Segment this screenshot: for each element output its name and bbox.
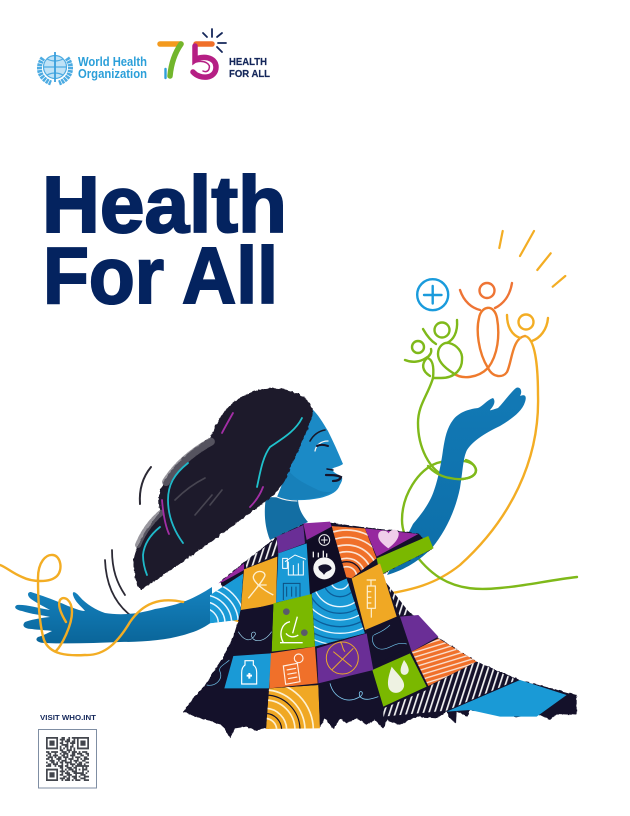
- patch: green drops: [372, 653, 427, 707]
- left arm and hand: [15, 587, 212, 643]
- neck: [265, 497, 308, 540]
- woman figure: [15, 388, 578, 738]
- icon: microscope: [280, 608, 308, 643]
- face: [277, 408, 343, 500]
- icon: document: [283, 654, 303, 684]
- line figures and threads: [183, 231, 577, 621]
- icon: houses: [283, 555, 306, 600]
- sun rays above figures: [499, 231, 565, 287]
- number 7: [160, 44, 181, 78]
- dress base: [183, 523, 577, 738]
- visit link label: VISIT WHO.INT: [40, 713, 96, 722]
- icon: water drops: [388, 660, 409, 693]
- yellow thread over left hand: [0, 555, 183, 655]
- patch: thread bottom left: [207, 660, 229, 685]
- patch: purple upper: [277, 525, 305, 553]
- number 5: [193, 44, 216, 77]
- patch: orange stripes: [412, 638, 477, 686]
- green figures: [405, 320, 462, 378]
- patchwork dress: [183, 522, 578, 738]
- icon: globe and plus: [313, 535, 335, 579]
- patch: black stripes right: [387, 583, 410, 617]
- icon: prohibited scissors: [326, 642, 358, 674]
- patch: black swirl right: [365, 618, 408, 667]
- icon: WHO emblem: [39, 52, 71, 83]
- face shadow: [277, 470, 333, 499]
- QR code: [38, 730, 96, 788]
- icon: syringe: [367, 580, 376, 618]
- patch: blue house: [276, 543, 310, 603]
- sun rays: [203, 29, 226, 52]
- thread motif: [238, 632, 272, 641]
- patch: yellow arcs: [266, 685, 320, 729]
- patch: orange arcs: [332, 526, 376, 578]
- QR frame: [38, 730, 96, 788]
- title: [42, 160, 287, 320]
- patch: yellow syringe: [352, 563, 397, 630]
- patch: black globe: [305, 527, 347, 593]
- patch: purple heart: [365, 528, 418, 557]
- yellow small loop: [56, 598, 72, 651]
- patch: blue bottle: [224, 653, 271, 688]
- icon: ribbon: [248, 571, 273, 598]
- text: World Health Organization: [78, 55, 147, 81]
- logo tagline: [229, 57, 270, 80]
- hair motion lines: [105, 467, 151, 615]
- patch: blue sleeve arcs: [210, 574, 244, 624]
- patch: black stripes upper: [245, 538, 278, 568]
- patch: black swirl left: [233, 605, 273, 656]
- patch: magenta wedge: [218, 563, 244, 583]
- patch: magenta collar: [303, 522, 332, 540]
- patch: blue hem: [447, 680, 567, 717]
- patch: green microscope: [272, 594, 315, 652]
- icon: heart: [378, 530, 399, 548]
- logo tagline: FOR ALL: [229, 69, 270, 80]
- orange figure and thread: [453, 283, 525, 377]
- green loop over right arm: [428, 460, 476, 479]
- yellow figure: [507, 314, 548, 341]
- patch: purple scissors: [317, 633, 373, 683]
- 75 logo: [160, 29, 226, 78]
- threads in front of arms: [0, 460, 476, 655]
- thread motif bottom: [330, 683, 378, 700]
- yellow thread: [183, 336, 538, 621]
- patch: orange document: [269, 647, 318, 688]
- title: For All: [43, 231, 278, 320]
- hair highlights: [143, 413, 302, 575]
- hair: [133, 388, 313, 590]
- icon: medicine bottle: [242, 661, 257, 684]
- thread motif: [372, 625, 407, 649]
- patch: black white stripes bottom: [383, 662, 517, 717]
- text: World Health Organization: World Health: [78, 55, 147, 69]
- title: Health: [42, 160, 287, 249]
- WHO logo: [39, 52, 147, 83]
- green thread: [402, 378, 577, 589]
- right arm and hand: [387, 388, 526, 575]
- patch: yellow ribbon: [241, 557, 277, 612]
- text: World Health Organization: Organization: [78, 67, 147, 81]
- QR modules: [46, 738, 89, 780]
- patch: purple right: [400, 615, 438, 652]
- icon: plus in circle: [417, 279, 448, 310]
- face details: [277, 430, 341, 501]
- logo tagline: HEALTH: [229, 57, 267, 68]
- patch: blue centre arcs: [312, 578, 365, 646]
- hair texture: [138, 441, 222, 545]
- patch: green sleeve: [377, 536, 433, 575]
